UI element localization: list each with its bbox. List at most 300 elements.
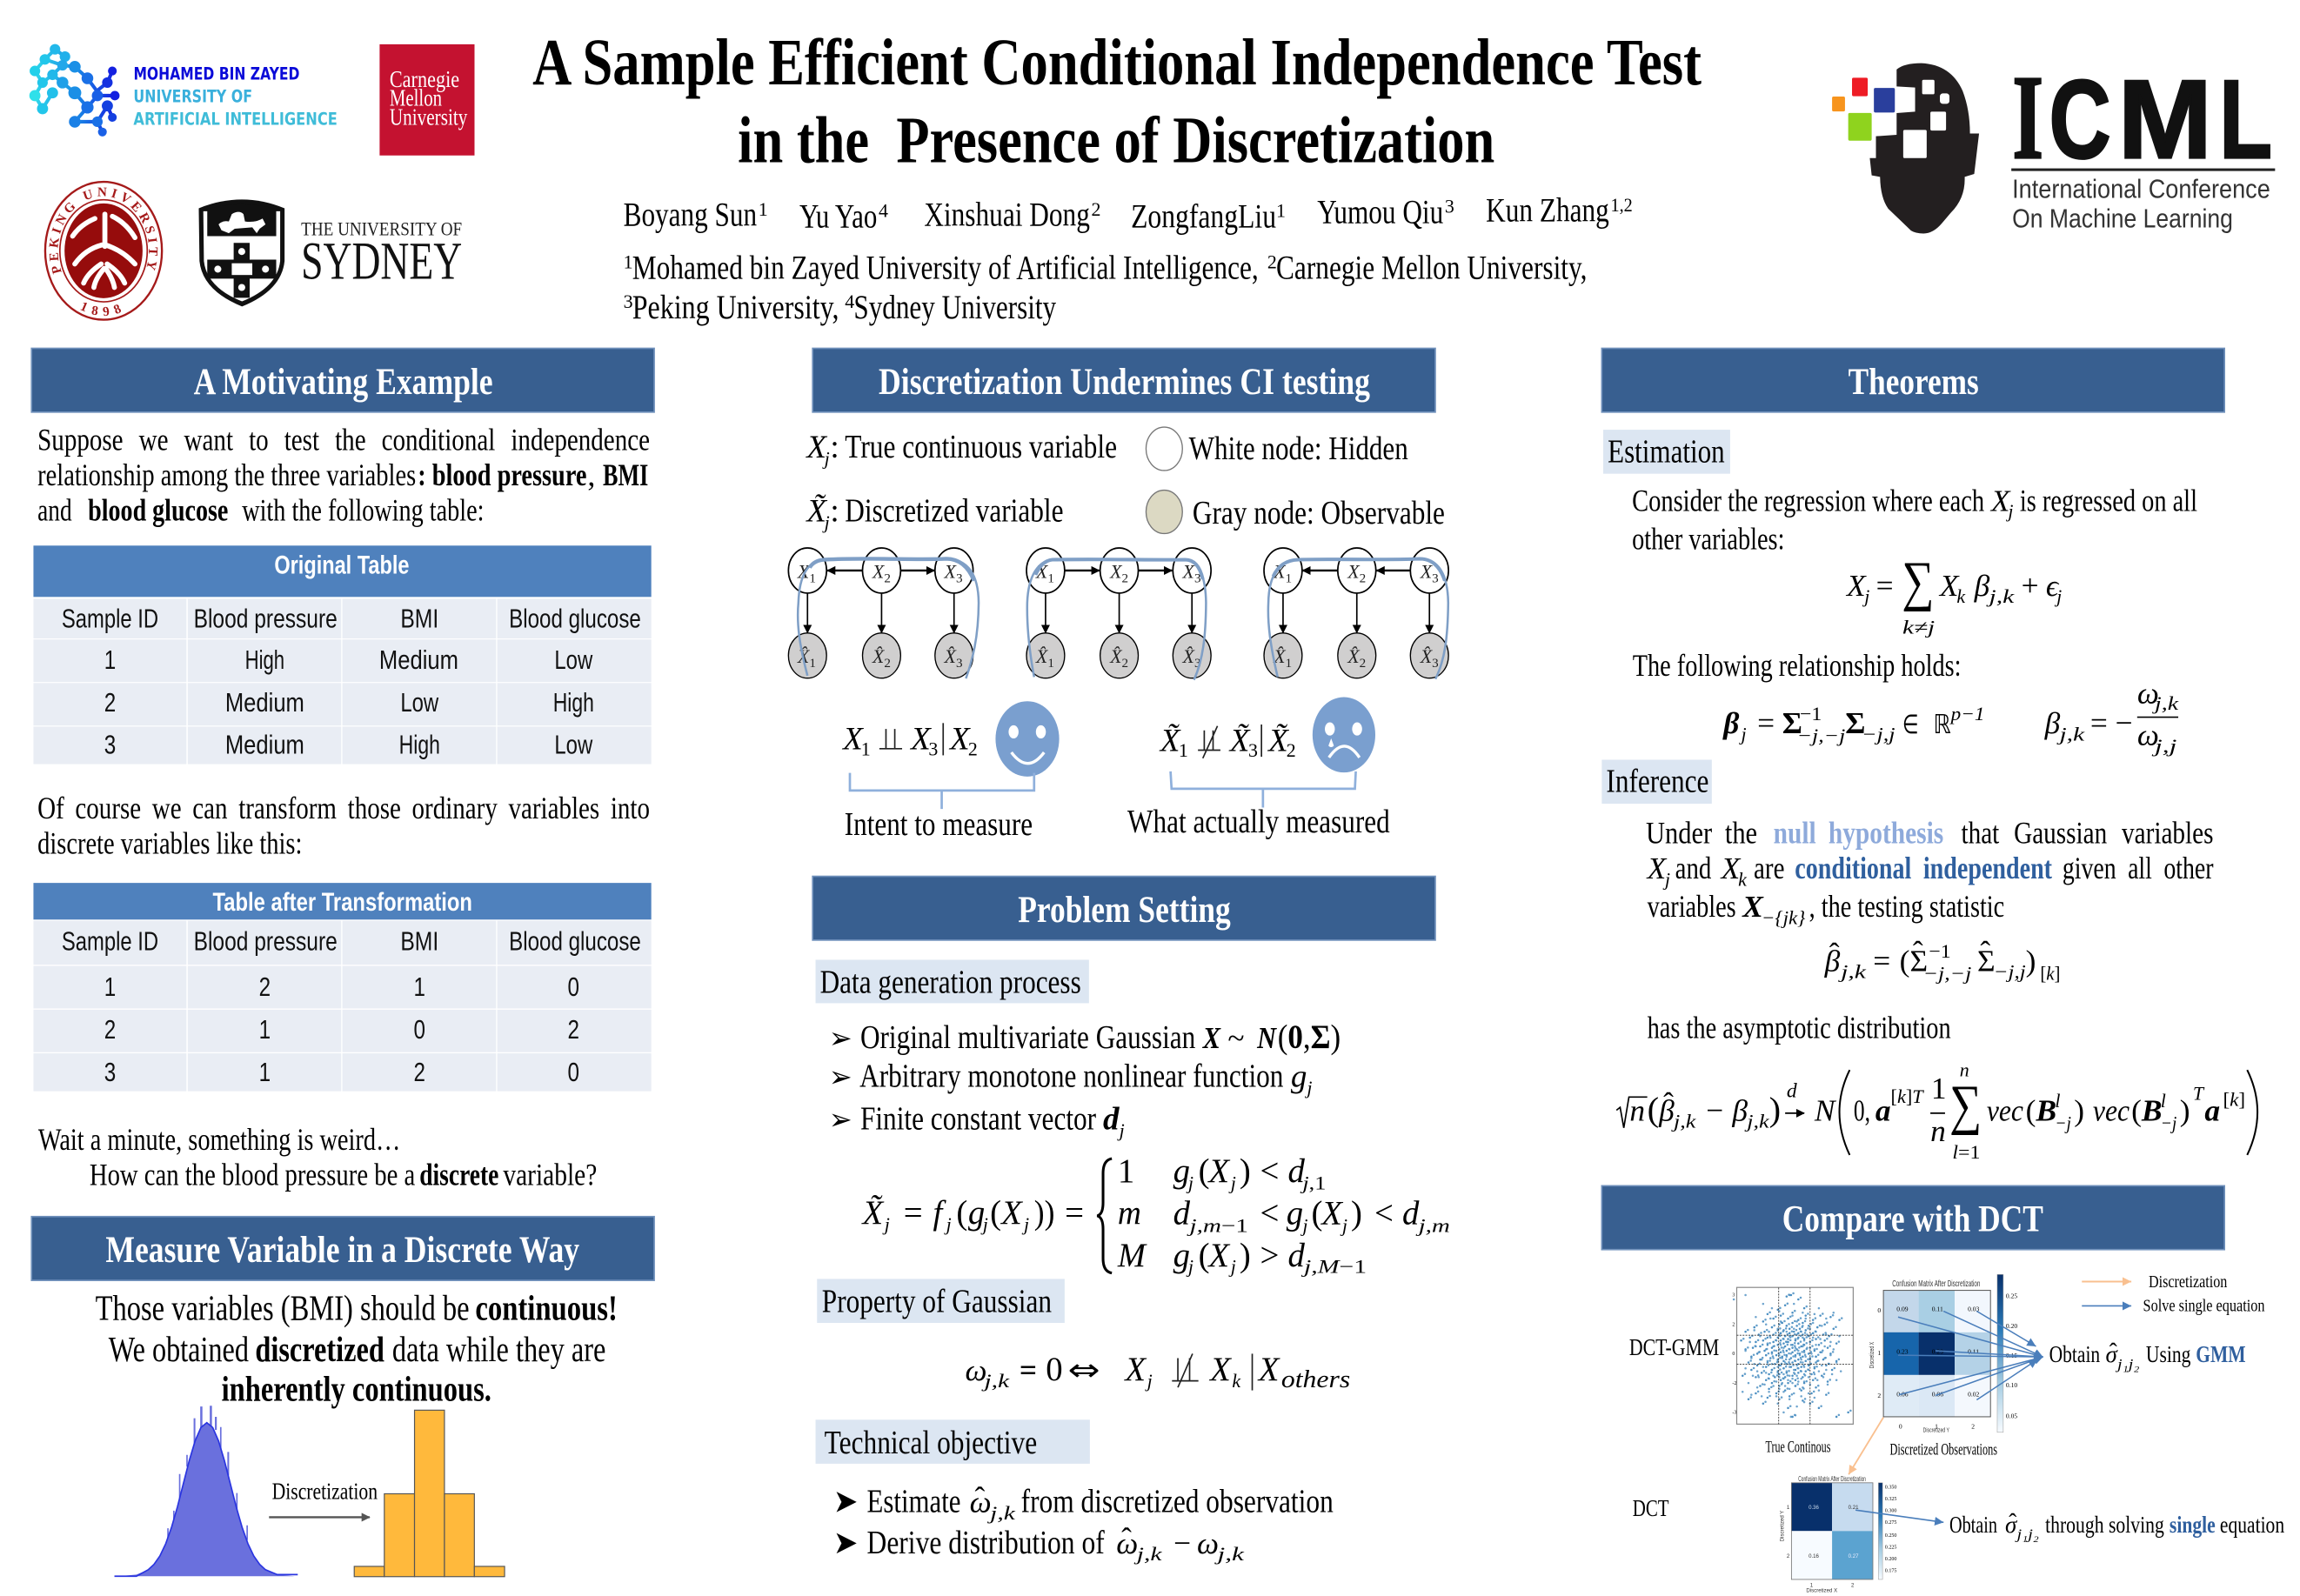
text block: null hypothesis: and (1675, 851, 1711, 885)
logo: University of Sydney: THE UNIVERSITY OF (301, 218, 462, 240)
formula: precision relation: Σ (1845, 705, 1865, 740)
formula: discretization function: j (944, 1213, 952, 1235)
diagram: graph 2: 1 (1047, 571, 1054, 585)
colorbar: large matrix: 0.15 (2006, 1352, 2017, 1359)
chart: confusion matrix small (1780, 1474, 1896, 1593)
arrows: solve equations to GMM (1898, 1312, 2043, 1400)
chart: confusion matrix small: Discretized Y (1780, 1511, 1785, 1541)
formula: precision zero equivalence: 0 (1046, 1351, 1063, 1388)
diagram: graph 1: X̂ (872, 645, 886, 667)
diagram: graph 2: 2 (1121, 571, 1128, 585)
diagram: graph 3: X (1347, 560, 1361, 582)
formula: precision zero equivalence: = (1020, 1352, 1037, 1387)
chart: confusion matrix large: 1 (1877, 1349, 1881, 1357)
formula: regression sum: X (1938, 568, 1960, 603)
list: data generation steps: (0,Σ) (1278, 1018, 1341, 1056)
text block: intro: with the following table: (242, 493, 484, 528)
subheading: Estimation: Estimation (1608, 434, 1725, 471)
chart: scatter true continuous: -2 (1732, 1381, 1736, 1386)
table: original table (33, 545, 652, 765)
formula: asymptotic distribution: B (2035, 1092, 2056, 1127)
diagram: graph 1: 3 (956, 571, 963, 585)
caption: discretized observations: Discretized Observations (1890, 1441, 1997, 1459)
legend: variable and node types: X (805, 430, 827, 465)
heading: Problem Setting (812, 877, 1435, 940)
list: technical objectives: ➤ (833, 1524, 858, 1561)
heading: Compare with DCT (1601, 1185, 2224, 1250)
formula: discretization function: M (1117, 1237, 1148, 1274)
table: original table: Medium (379, 646, 458, 675)
formula: discretization function: d (1402, 1195, 1420, 1232)
formula: regression sum: X (1845, 568, 1867, 603)
table: original table: Medium (225, 689, 304, 718)
formula: discretization function: j,M −1 (1300, 1256, 1367, 1278)
text block: weird question: discrete (419, 1158, 498, 1192)
formula: testing statistic: ( (1900, 943, 1909, 978)
subheading: Inference (1601, 759, 1712, 804)
text: obtain through single equation: equation (2220, 1512, 2285, 1538)
legend: variable and node types: White node: Hidden (1189, 431, 1408, 467)
logo: University of Sydney (198, 199, 462, 306)
formula: asymptotic distribution: j,k (1670, 1111, 1697, 1132)
text block: weird question: variable? (503, 1158, 597, 1192)
diagram: graph 2: X̂ (1035, 645, 1049, 667)
formula: precision zero equivalence: j (1145, 1370, 1153, 1392)
affiliations: Peking University, (632, 289, 839, 326)
formula: precision zero equivalence (966, 1351, 1350, 1393)
table: after transformation: 2 (414, 1058, 425, 1087)
affiliations: 4 (845, 290, 854, 312)
text block: weird question (38, 1122, 597, 1192)
chart: confusion matrix small: 0.21 (1849, 1506, 1859, 1511)
list: technical objectives: ˆ (974, 1479, 985, 1514)
formula: discretization function: j (1021, 1213, 1029, 1235)
formula: intended independence: X (948, 722, 971, 758)
text block: weird question: How can the blood pressure be a (90, 1158, 415, 1192)
formula: testing statistic: β (1824, 943, 1841, 978)
list: data generation steps: d (1103, 1101, 1120, 1137)
table: after transformation (33, 883, 652, 1092)
formula: regression sum: ∑ (1902, 551, 1934, 612)
formula: discretization function: > (1260, 1237, 1279, 1274)
table: original table: High (553, 689, 594, 718)
formula: testing statistic: Σ (1977, 943, 1996, 978)
title: in the Presence of Discretization (738, 103, 1494, 177)
heading: Measure Variable in a Discrete Way (31, 1217, 654, 1280)
list: technical objectives: from discretized observation (1021, 1484, 1334, 1520)
diagram: graph 2: X̂ (1109, 645, 1123, 667)
chart: discretized histogram (354, 1410, 505, 1577)
chart: confusion matrix small: 0.300 (1885, 1509, 1896, 1514)
formula: discretization function: g (1173, 1237, 1190, 1274)
formula: testing statistic: −j,−j (1923, 962, 1971, 984)
diagram: graph 1: 2 (884, 571, 891, 585)
text: obtain through single equation: through solving (2045, 1512, 2164, 1538)
text block: regression (1632, 483, 2197, 557)
colorbar: large matrix: 0.20 (2006, 1322, 2017, 1330)
list: data generation steps: j (1304, 1077, 1313, 1099)
panel: A Motivating Example (31, 348, 654, 1192)
authors (624, 192, 1633, 235)
formula: discretization function: j,m −1 (1187, 1214, 1248, 1236)
heading: Discretization Undermines CI testing: Discretization Undermines CI testing (879, 362, 1370, 403)
formula: testing statistic: −1 (1929, 940, 1951, 962)
formula: discretization function: m (1118, 1195, 1141, 1232)
arrow: discretization: Discretization (272, 1478, 378, 1505)
list: technical objectives (833, 1479, 1334, 1565)
formula: regression sum: k (1956, 585, 1966, 607)
logo: Carnegie Mellon University: Mellon (390, 84, 442, 110)
formula: precision relation: ω (2137, 718, 2159, 752)
table: original table: Low (400, 689, 438, 718)
text: obtain through single equation (1949, 1509, 2285, 1543)
table: after transformation: 2 (104, 1016, 116, 1045)
list: data generation steps: Arbitrary monotone nonlinear function (859, 1058, 1283, 1095)
text block: regression: other variables: (1632, 522, 1784, 557)
legend: variable and node types: X̃ (805, 493, 827, 529)
formula: precision relation: j,j (2151, 735, 2176, 757)
text block: null hypothesis: Under the (1646, 816, 1757, 851)
logo: Carnegie Mellon University (379, 44, 474, 156)
text block: intro: relationship among the three variables (37, 457, 416, 492)
formula: testing statistic: ˆ (1980, 934, 1990, 969)
authors: Yumou Qiu (1317, 193, 1443, 230)
formula: asymptotic distribution: −j (2161, 1112, 2176, 1133)
formula: asymptotic distribution: β (1731, 1092, 1748, 1127)
chart: confusion matrix large: Discretized X (1868, 1342, 1875, 1368)
formula: asymptotic distribution: l=1 (1952, 1141, 1980, 1163)
diagram: graph 1: 2 (884, 656, 891, 671)
list: data generation steps: X (1202, 1020, 1221, 1055)
formula: discretization function: ) (1240, 1152, 1251, 1190)
formula: measured dependence (1159, 723, 1296, 761)
logo: Mohamed bin Zayed University of Artificial Intelligence (30, 44, 338, 137)
table: after transformation: 1 (104, 973, 116, 1002)
chart: confusion matrix large: 0 (1877, 1306, 1881, 1314)
chart: confusion matrix small: 0.225 (1885, 1546, 1896, 1551)
logo: ICML: M (2118, 57, 2212, 182)
text block: null hypothesis: k (1738, 869, 1748, 891)
text block: null hypothesis: are (1754, 851, 1784, 885)
text block: intro: BMI (603, 457, 648, 492)
formula: discretization function: < (1260, 1195, 1279, 1232)
formula: regression sum: = (1876, 568, 1894, 603)
formula: discretization function: d (1173, 1195, 1191, 1232)
formula: intended independence: 1 (861, 738, 871, 759)
legend: arrow types: Solve single equation (2143, 1297, 2265, 1316)
table: after transformation: 0 (568, 973, 579, 1002)
formula: discretization function: )) (1034, 1194, 1054, 1232)
chart: scatter true continuous: 2 (1732, 1322, 1735, 1327)
diagram: graph 1: 1 (809, 656, 816, 671)
legend: variable and node types: Discretized variable (845, 492, 1064, 529)
logo: ICML: C (2049, 57, 2110, 182)
chart: confusion matrix small: 0.350 (1885, 1486, 1896, 1491)
table: original table: Low (554, 731, 592, 760)
formula: asymptotic distribution: n (1629, 1092, 1645, 1127)
text block: null hypothesis: X (1646, 851, 1668, 885)
chart: confusion matrix small: Discretized X (1806, 1588, 1837, 1593)
text block: null hypothesis: j (1662, 869, 1670, 891)
list: data generation steps: N (1256, 1020, 1277, 1055)
formula: precision zero equivalence: X (1257, 1351, 1280, 1388)
formula: precision relation: −j,−j (1797, 725, 1845, 746)
formula: testing statistic: −j,j (1994, 961, 2026, 983)
text block: null hypothesis (1646, 816, 2214, 928)
diagram: graph 1: X̂ (797, 645, 811, 667)
chart: confusion matrix large (1868, 1279, 1990, 1434)
list: data generation steps: g (1291, 1059, 1307, 1095)
formula: precision zero equivalence: X (1123, 1351, 1147, 1388)
formula: asymptotic distribution: a (1875, 1092, 1891, 1127)
brace: intent to measure (845, 773, 1034, 843)
formula: measured dependence: X̃ (1159, 723, 1181, 758)
text: obtain using GMM: Using (2146, 1341, 2190, 1367)
chart: confusion matrix small: Confusion Matrix After Discretization (1798, 1474, 1866, 1483)
logo: Mohamed bin Zayed University of Artificial Intelligence: MOHAMED BIN ZAYED (133, 64, 299, 84)
formula: testing statistic: = (1873, 943, 1890, 978)
table: after transformation: Blood pressure (194, 928, 338, 957)
text block: null hypothesis: variables (1648, 889, 1736, 924)
diagram: graph 2: 3 (1194, 571, 1201, 585)
chart: confusion matrix small: 0.325 (1885, 1497, 1896, 1502)
formula: precision zero equivalence: X (1208, 1351, 1232, 1388)
formula: discretization function: f (933, 1194, 946, 1232)
text: obtain through single equation: Obtain (1949, 1512, 1997, 1538)
list: technical objectives: − (1173, 1526, 1191, 1560)
formula: discretization function: X (1000, 1194, 1023, 1232)
chart: confusion matrix small: 0.250 (1885, 1533, 1896, 1539)
table: after transformation: 2 (259, 973, 271, 1002)
text block: null hypothesis: given all other (2063, 851, 2214, 885)
diagram: graph 3: X (1420, 560, 1434, 582)
logo: Mohamed bin Zayed University of Artificial Intelligence: ARTIFICIAL INTELLIGENCE (133, 109, 338, 129)
panel: Discretization Undermines CI testing (788, 348, 1448, 843)
text: obtain through single equation: σ (2005, 1512, 2018, 1538)
formula: precision relation: − (2116, 705, 2133, 740)
title: A Sample Efficient Conditional Independence Test (532, 25, 1702, 99)
text block: null hypothesis: conditional independent (1795, 851, 2052, 885)
formula: asymptotic distribution: d (1787, 1079, 1797, 1102)
formula: precision relation: j,k (2056, 724, 2086, 745)
formula: regression sum (1845, 551, 2062, 638)
text: obtain using GMM: GMM (2196, 1341, 2246, 1367)
list: data generation steps: ➢ (829, 1102, 852, 1136)
text: obtain using GMM: ˆ (2109, 1339, 2117, 1365)
authors: Boyang Sun (624, 197, 757, 234)
chart: confusion matrix large: Discretized Y (1923, 1426, 1949, 1434)
diagram: graph 3: 1 (1286, 656, 1292, 671)
text block: intro (37, 423, 650, 528)
formula: regression sum: j (2054, 585, 2062, 607)
diagram: graph 3: X̂ (1347, 645, 1361, 667)
text block: null hypothesis: X (1720, 851, 1742, 885)
diagram: graph 1: X (872, 560, 886, 582)
formula: asymptotic distribution: ∑ (1949, 1074, 1982, 1136)
formula: regression sum: j,k (1985, 585, 2016, 607)
legend: variable and node types: Gray node: Observable (1193, 495, 1445, 531)
title (532, 25, 1702, 177)
formula: discretization function: ) (1351, 1195, 1362, 1232)
chart: confusion matrix large: 1 (1935, 1422, 1938, 1430)
subheading: Inference: Inference (1606, 764, 1708, 800)
formula: discretization function: = (904, 1194, 923, 1232)
formula: precision zero equivalence: ⇔ (1068, 1352, 1100, 1388)
formula: testing statistic (1824, 934, 2060, 984)
formula: discretization function: = (1065, 1194, 1084, 1232)
logo: ICML: I (2012, 50, 2043, 184)
text: obtain through single equation: j₁j₂ (2015, 1526, 2039, 1543)
formula: precision relation: −1 (1800, 703, 1822, 725)
table: after transformation: Sample ID (62, 928, 158, 957)
table: after transformation: Blood glucose (509, 928, 641, 957)
logo: Carnegie Mellon University: Carnegie (390, 66, 459, 92)
legend: arrow types: Discretization (2149, 1272, 2227, 1292)
formula: discretization function: g (1173, 1152, 1190, 1190)
chart: confusion matrix small: 1 (1810, 1584, 1814, 1589)
text block: weird question: Wait a minute, something is weird… (38, 1122, 400, 1157)
affiliations: Carnegie Mellon University, (1276, 249, 1587, 286)
diagram: graph 3: X̂ (1420, 645, 1434, 667)
logo: ICML: On Machine Learning (2012, 204, 2233, 233)
text block: null hypothesis: that Gaussian variables (1961, 816, 2214, 851)
formula: asymptotic distribution: 1 (1931, 1071, 1947, 1105)
list: technical objectives: ω (1197, 1526, 1219, 1560)
authors: 4 (879, 200, 888, 222)
diagram: graph 2: X (1182, 560, 1196, 582)
chart: confusion matrix large: 0.11 (1968, 1347, 1979, 1355)
text block: continuous statement: discretized (255, 1329, 384, 1369)
legend: variable and node types: : (830, 430, 839, 465)
formula: precision relation: = (2090, 705, 2108, 740)
logo: Peking University (43, 181, 164, 321)
formula: testing statistic: Σ (1909, 943, 1928, 978)
text block: continuous statement: continuous! (475, 1288, 618, 1328)
list: data generation steps: j (1117, 1119, 1125, 1141)
text block: intro: Suppose we want to test the conditional independence (37, 423, 650, 457)
formula: precision relation: Σ (1782, 705, 1802, 740)
diagram: graph 1: 3 (956, 656, 963, 671)
formula: discretization function: X (1320, 1195, 1343, 1232)
text block: null hypothesis: X (1742, 889, 1764, 924)
text block: continuous statement: inherently continuous. (222, 1368, 491, 1408)
chart: confusion matrix large: 2 (1971, 1422, 1975, 1430)
formula: discretization function: j,1 (1300, 1172, 1326, 1194)
formula: precision relation: β (1722, 705, 1739, 740)
formula: asymptotic distribution: vec (2093, 1092, 2130, 1127)
text block: intro: : blood pressure (418, 457, 586, 492)
authors: ZongfangLiu (1131, 197, 1276, 235)
logo: Peking University: 1898 (80, 303, 121, 317)
heading: A Motivating Example: A Motivating Example (194, 362, 493, 403)
logo: ICML: L (2219, 57, 2272, 182)
authors: 3 (1445, 196, 1454, 217)
authors: Kun Zhang (1486, 192, 1609, 230)
formula: measured dependence: 1 (1179, 739, 1188, 761)
formula: discretization function: ( (1311, 1195, 1322, 1232)
logo: ICML (1832, 50, 2275, 233)
formula: measured dependence: 3 (1248, 739, 1258, 761)
formula: measured dependence: 2 (1287, 739, 1296, 761)
list: technical objectives: Derive distribution of (867, 1525, 1105, 1561)
formula: discretization function: ) (1240, 1237, 1251, 1274)
list: technical objectives: ω (970, 1485, 992, 1519)
formula: precision relation: j (1739, 724, 1747, 745)
chart: confusion matrix large: 0.02 (1968, 1390, 1980, 1398)
diagram: graph 3: X̂ (1273, 645, 1287, 667)
formula: asymptotic distribution: ) (2074, 1092, 2084, 1127)
chart: confusion matrix small: 0.200 (1885, 1557, 1896, 1562)
diagram: graph 3 (1264, 548, 1448, 679)
chart: scatter true continuous: 0 (1732, 1352, 1735, 1357)
formula: discretization function: j,m (1415, 1214, 1450, 1236)
formula: precision relation: β (2044, 705, 2061, 740)
heading: Compare with DCT: Compare with DCT (1782, 1199, 2043, 1240)
formula: discretization function: j (1186, 1256, 1193, 1278)
chart: scatter true continuous: 3 (1732, 1293, 1735, 1299)
formula: intended independence: 3 (928, 738, 938, 759)
chart: confusion matrix small: 0.16 (1809, 1554, 1820, 1559)
text block: null hypothesis: null hypothesis (1774, 816, 1943, 851)
formula: precision relation: j,k (2151, 692, 2180, 714)
formula: regression sum: j (1862, 585, 1869, 607)
text block: null hypothesis: −{jk} (1762, 906, 1806, 928)
diagram: graph 2: 1 (1047, 656, 1054, 671)
chart: continuous histogram (115, 1406, 298, 1576)
table: original table: Low (554, 646, 592, 675)
heading: A Motivating Example (31, 348, 654, 412)
text block: regression: is regressed on all (2020, 483, 2197, 518)
authors: Yu Yao (799, 197, 877, 235)
table: original table: 2 (104, 689, 116, 718)
formula: asymptotic distribution (1616, 1059, 2257, 1163)
list: data generation steps: ➢ (829, 1021, 852, 1055)
table: after transformation: 3 (104, 1058, 116, 1087)
table: original table: 1 (104, 646, 116, 675)
caption: true continuous: True Continous (1766, 1438, 1830, 1456)
text: obtain through single equation: single (2170, 1512, 2216, 1538)
chart: confusion matrix large: Confusion Matrix After Discretization (1892, 1279, 1980, 1289)
chart: confusion matrix large: 2 (1877, 1392, 1881, 1399)
text: obtain using GMM: σ (2106, 1341, 2119, 1367)
text: obtain using GMM (2049, 1339, 2246, 1372)
list: data generation steps: ➢ (829, 1060, 852, 1094)
formula: asymptotic distribution: ) (1769, 1091, 1781, 1128)
list: data generation steps: ~ (1227, 1020, 1245, 1055)
logo: Peking University: PEKING UNIVERSITY (49, 188, 158, 275)
legend: variable and node types: True continuous variable (845, 429, 1117, 465)
legend: variable and node types: j (822, 448, 830, 470)
diagram: graph 3: 2 (1360, 571, 1366, 585)
label: DCT: DCT (1633, 1495, 1669, 1521)
diagram: graph 3: 3 (1432, 656, 1439, 671)
diagram: graph 2: 3 (1194, 656, 1201, 671)
chart: confusion matrix large: 0.06 (1932, 1390, 1943, 1398)
formula: asymptotic distribution: n (1960, 1059, 1969, 1081)
list: data generation steps: Finite constant vector (860, 1100, 1096, 1137)
text block: transform note: discrete variables like this: (37, 825, 302, 860)
formula: asymptotic distribution: N (1814, 1092, 1837, 1127)
formula: discretization function: j (1228, 1256, 1236, 1278)
text block: continuous statement: Those variables (BMI) should be (96, 1288, 470, 1329)
text block: intro: , (587, 457, 595, 492)
formula: precision relation: −j,j (1862, 724, 1895, 745)
chart: confusion matrix small: 0.27 (1849, 1554, 1859, 1559)
formula: discretization function: g (968, 1194, 985, 1232)
formula: testing statistic: j,k (1837, 961, 1868, 983)
formula: discretization function: g (1287, 1195, 1303, 1232)
formula: discretization function: j (882, 1213, 890, 1235)
